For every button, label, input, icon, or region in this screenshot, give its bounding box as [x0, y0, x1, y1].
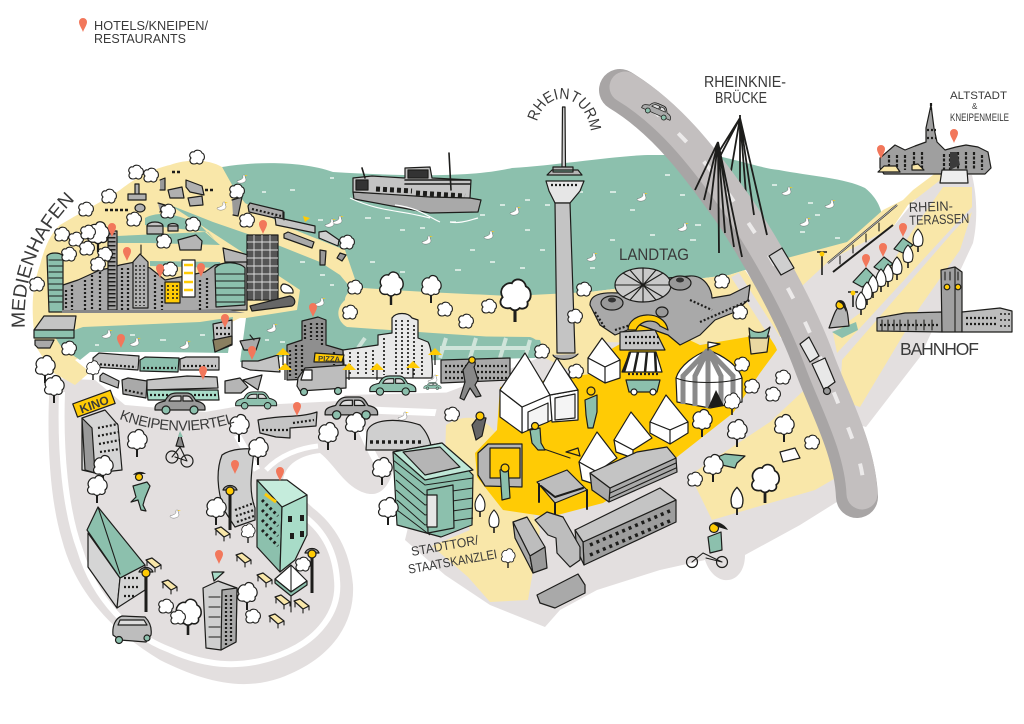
festival buildings [478, 444, 677, 608]
market stall [622, 352, 662, 395]
Kino sign [73, 390, 115, 418]
building and walking man [441, 357, 510, 400]
Curved building [218, 449, 255, 527]
Mint roof house [87, 507, 145, 608]
Beer garden parasol [275, 565, 307, 612]
ground: grey streets centre and festival surroundings [405, 330, 850, 627]
Mint tower [257, 480, 307, 572]
label: Stadttor / Staatskanzlei: STADTTOR/ [410, 532, 480, 559]
location pins [108, 129, 958, 564]
label: Altstadt & Kneipenmeile: ALTSTADT [950, 90, 1007, 102]
ground: grey streets right [790, 173, 976, 427]
label: Rheinkniebrücke: RHEINKNIE- [704, 74, 786, 91]
festival stall near bridge [749, 327, 770, 354]
label: Medienhafen: MEDIENHAFEN [12, 192, 74, 327]
Rheinkniebrücke road [620, 87, 863, 497]
Medienhafen skyline [47, 231, 295, 313]
yellow umbrellas [276, 348, 442, 380]
festival people and dog [472, 387, 800, 500]
Medienhafen bridge block [34, 316, 76, 348]
label: Altstadt & Kneipenmeile: & [972, 102, 978, 111]
sand: Medienhafen [33, 161, 358, 385]
Altstadt skyline [878, 103, 991, 183]
label: Altstadt & Kneipenmeile [950, 90, 1009, 124]
sand: Staatskanzlei garden [432, 418, 540, 602]
label: Rheinturm: RHEINTURM [527, 88, 602, 130]
label: Rhein-Terassen: TERASSEN [909, 211, 970, 228]
label: Rheinkniebrücke: BRÜCKE [715, 89, 767, 107]
sand: river strip and piers [160, 167, 357, 287]
harbourside building rows [93, 320, 280, 400]
water: marina with jetties [350, 335, 539, 362]
legend text: HOTELS/KNEIPEN/ [94, 19, 209, 33]
grey path under bridge to Landtag [735, 275, 780, 345]
Rheinturm [546, 107, 584, 359]
bridge cables over road [695, 118, 767, 257]
bushes [30, 150, 819, 624]
sand: right bank and Rhine terraces [690, 172, 972, 520]
legend pin [79, 18, 87, 32]
circus tent [676, 342, 742, 408]
people in Kneipenviertel [131, 431, 193, 511]
small car Kneipenviertel [113, 616, 151, 644]
river waves [95, 175, 840, 345]
central grey buildings [258, 412, 432, 450]
Pizza van: PIZZA [318, 354, 341, 364]
water: harbour fingers [117, 214, 222, 268]
legend text: RESTAURANTS [94, 32, 186, 46]
yellow festival ground [475, 312, 777, 517]
ducks [102, 175, 836, 518]
Kino tower [82, 410, 122, 473]
street cars [155, 376, 441, 419]
label: Kneipenviertel: KNEIPENVIERTEL [120, 410, 234, 431]
terrace trees [856, 229, 923, 315]
dark skyscraper cluster [287, 317, 343, 380]
Kino sign: KINO [78, 393, 111, 416]
bridge pylon and cables behind road [695, 115, 747, 207]
ground: grey streets left [48, 378, 480, 684]
Stadttor teal building [393, 443, 473, 537]
Rheinterrassen railing [817, 205, 897, 307]
label: Rhein-Terassen [909, 198, 970, 228]
label: Rhein-Terassen: RHEIN- [909, 198, 953, 215]
label: Stadttor / Staatskanzlei [404, 530, 498, 577]
Rheinterrassen parasols [853, 238, 913, 287]
ferry [350, 153, 481, 223]
picnic person [829, 300, 858, 338]
Bahnhof [877, 267, 1012, 332]
water: Rhine [170, 155, 882, 362]
cyclist [686, 522, 728, 568]
Tall grey building [203, 572, 237, 650]
label: Stadttor / Staatskanzlei: STAATSKANZLEI [407, 546, 498, 577]
Landtag [590, 268, 750, 350]
street lamps and benches [139, 486, 319, 628]
festival tents [500, 338, 688, 485]
vehicles on bridge [641, 98, 835, 395]
legend text [94, 19, 209, 46]
label: Landtag: LANDTAG [619, 246, 689, 264]
water: Medienhafen lower channel [55, 317, 233, 360]
sand: Rheinturm peninsula [338, 270, 785, 378]
Medienhafen small harbour buildings [105, 172, 346, 265]
white skyscrapers [343, 314, 432, 378]
Pizza van [297, 353, 346, 396]
label: Rheinkniebrücke [704, 74, 786, 107]
label: Bahnhof: BAHNHOF [900, 339, 979, 359]
trees [36, 222, 794, 635]
